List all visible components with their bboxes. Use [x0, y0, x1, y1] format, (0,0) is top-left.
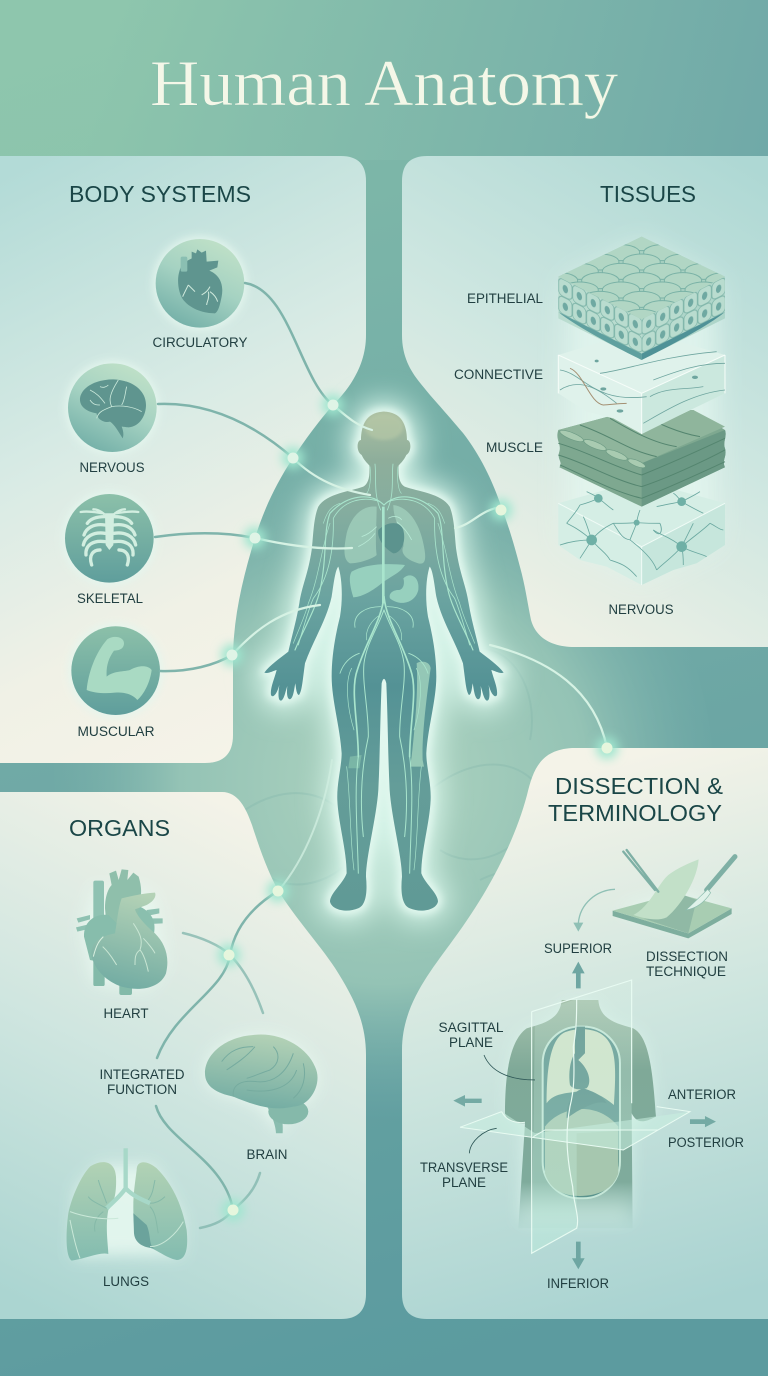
- organ group: [67, 869, 318, 1261]
- human body figure: [264, 412, 504, 911]
- heading: dissection and terminology: TERMINOLOGY: [548, 800, 722, 826]
- organ: heart: [76, 869, 167, 995]
- node: skeletal junction: [244, 527, 266, 549]
- leader: sagittal plane: [484, 1055, 535, 1080]
- organ: lungs: [67, 1148, 187, 1261]
- node: organs junction: [267, 880, 289, 902]
- connector: skeletal: [155, 533, 352, 548]
- connector: muscular: [160, 605, 320, 671]
- node: tissues junction: [490, 499, 512, 521]
- panel: organs: [0, 792, 366, 1319]
- label: superior: SUPERIOR: [544, 941, 612, 956]
- label: lungs: LUNGS: [103, 1274, 149, 1289]
- label: heart: HEART: [104, 1006, 148, 1021]
- label: muscle: MUSCLE: [486, 440, 543, 455]
- dissection diagram: [453, 850, 735, 1269]
- left knee bone: [348, 755, 362, 768]
- connector lines and nodes: [155, 283, 607, 1228]
- icon: dissection technique: [613, 850, 735, 938]
- label: sagittal plane: PLANE: [449, 1035, 493, 1050]
- internal organs: [344, 505, 425, 603]
- arrow: lateral left: [453, 1095, 482, 1107]
- connector: nervous: [158, 404, 370, 495]
- leader: transverse plane: [469, 1128, 497, 1153]
- node: nervous junction: [282, 447, 304, 469]
- tissue: nervous block: [558, 480, 725, 585]
- connector: organ links: [156, 891, 278, 1228]
- connector: organs upper: [278, 760, 332, 891]
- label: muscular: MUSCULAR: [78, 724, 155, 739]
- tissue: connective block: [558, 330, 725, 434]
- central almond backdrop: [54, 440, 714, 1120]
- label: nervous tissue: NERVOUS: [608, 602, 674, 617]
- arrow: inferior: [572, 1242, 585, 1269]
- veins: [293, 464, 475, 873]
- label: sagittal plane: SAGITTAL: [438, 1020, 504, 1035]
- arrow: lateral right: [690, 1116, 716, 1127]
- body silhouette: [264, 412, 504, 911]
- panel: body systems: [0, 156, 366, 763]
- label: connective: CONNECTIVE: [454, 367, 543, 382]
- label: dissection technique: TECHNIQUE: [646, 964, 726, 979]
- heading: tissues: TISSUES: [600, 181, 696, 207]
- node: circulatory junction: [322, 394, 344, 416]
- body outer glow: [264, 412, 504, 911]
- label: integrated function: INTEGRATED: [100, 1067, 185, 1082]
- head highlight: [365, 413, 403, 440]
- tissue: muscle block: [557, 410, 726, 507]
- node: lungs junction: [222, 1199, 244, 1221]
- node: dissection junction: [596, 737, 618, 759]
- label: epithelial: EPITHELIAL: [467, 291, 543, 306]
- label: circulatory: CIRCULATORY: [152, 335, 248, 350]
- label: transverse plane: PLANE: [442, 1175, 486, 1190]
- connector: tissues: [455, 507, 501, 528]
- heading: dissection and terminology: DISSECTION &: [555, 773, 723, 799]
- label: brain: BRAIN: [246, 1147, 288, 1162]
- icon: muscular: [68, 623, 163, 718]
- connector: dissection: [490, 645, 607, 748]
- label: posterior: POSTERIOR: [668, 1135, 744, 1150]
- icon: nervous: [65, 360, 160, 455]
- tissue: epithelial block: [558, 236, 725, 360]
- right femur bone: [410, 662, 431, 767]
- heading: organs: ORGANS: [69, 815, 170, 841]
- label: nervous: NERVOUS: [80, 460, 144, 475]
- connector: circulatory: [245, 283, 372, 430]
- label: dissection technique: DISSECTION: [646, 949, 728, 964]
- panel: dissection and terminology: [402, 748, 768, 1319]
- icon: skeletal: [62, 491, 157, 586]
- node: heart junction: [218, 944, 240, 966]
- arrow: superior: [572, 962, 585, 988]
- label: anterior: ANTERIOR: [668, 1087, 736, 1102]
- arrow: technique to superior: [573, 889, 615, 932]
- label: transverse plane: TRANSVERSE: [420, 1160, 508, 1175]
- label: skeletal: SKELETAL: [77, 591, 143, 606]
- label: inferior: INFERIOR: [547, 1276, 609, 1291]
- node: muscular junction: [221, 644, 243, 666]
- organ: brain: [205, 1035, 318, 1133]
- title: Human Anatomy: [150, 47, 618, 120]
- heading: body systems: BODY SYSTEMS: [69, 181, 251, 207]
- panel: tissues: [402, 156, 768, 647]
- label: integrated function: FUNCTION: [107, 1082, 177, 1097]
- tissue stack: [557, 236, 726, 585]
- icon: circulatory: [152, 236, 248, 331]
- torso with planes: [460, 980, 690, 1253]
- body inner glow: [264, 412, 504, 911]
